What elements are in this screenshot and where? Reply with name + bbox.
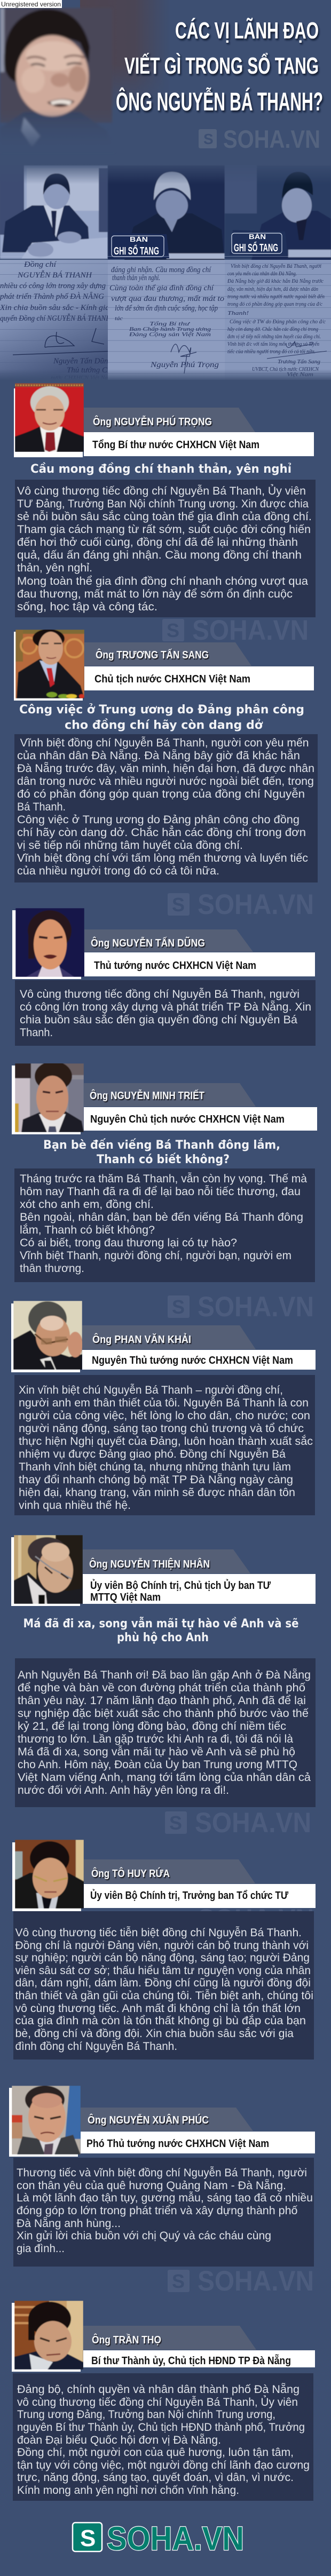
message text block: Thanh vĩnh biệt chúng ta, nhưng những thành tựu làm [19,1461,291,1473]
message text block: chí hãy còn dang dở. Chắc hẳn các đồng chí trong đơn [17,826,306,839]
sign: Bàn ghi sổ tang, right: BÀN [249,233,266,241]
message text block: hôm nay Thanh đã ra đi để lại bao nỗi tiếc thương, đau [20,1186,301,1198]
message text block: gia đình... [17,2243,65,2255]
message text block: có công lớn trong xây dựng và phát triển TP Đà Nẵng. Xin [20,1001,311,1013]
name tab: Ông TRẦN THỌ [92,2333,161,2346]
message text block: Đảng bộ, chính quyền và nhân dân thành phố Đà Nẵng [17,2383,300,2396]
message text block: đến hơi thở cuối cùng, đồng chí đã để lại những thành [17,536,298,548]
page: Trương Tấn Sang: con yêu mến của nhân dân Đà Nẵng. [227,271,297,277]
name tab [81,2108,253,2131]
page: Nguyễn Tấn Dũng: Nguyễn Tấn Dũng [53,357,112,365]
message text block: người anh em thân thiết của tôi. Nguyễn Bá Thanh là con [19,1397,309,1409]
message text block [14,1168,315,1282]
page: Nguyễn Tấn Dũng: nhiều có công lớn trong xây dựng [0,282,106,290]
name tab [83,2326,256,2350]
page: Nguyễn Tấn Dũng: Xin chia buồn sâu sắc - Kính gia [0,304,109,312]
message text block: Đồng chí, một người con của quê hương, luôn tận tâm, [17,2446,294,2459]
page: Nguyễn Phú Trọng: tác [115,315,123,322]
panel: Tô Huy Rứa [12,1840,316,2060]
role bar [84,952,315,976]
message text block: Thanh. [20,1027,53,1039]
message text block: sự nghiệp; người cán bộ năng động, sáng tạo; người Đảng [15,1952,310,1964]
page: Nguyễn Tấn Dũng: Thủ tướng CP [67,366,112,375]
role bar [83,1574,316,1604]
name tab: Ông NGUYỄN THIỆN NHÂN [89,1557,210,1570]
message text block: Đồng chí là người Đảng viên, người cán bộ trung thành với [15,1939,309,1952]
name tab [84,929,253,952]
message text block [15,980,316,1046]
message text block: Vĩnh biệt đồng chí với tấm lòng mến thương và luyến tiếc [17,852,308,864]
role bar [84,666,314,690]
message text block: Công việc ở Trung ương do Đảng phân công cho đồng [17,814,300,826]
message text block: thân thương. [20,1262,84,1275]
message text block: sự nghiệp đặc biệt xuất sắc cho thành phố bước vào thế [18,1707,309,1720]
message text block: Vô cùng thương tiếc đồng chí Nguyễn Bá Thanh, người [20,988,300,1000]
message text block: Việt Nam viếng Anh, mang tới tấm lòng của nhân dân cả [18,1771,311,1784]
message text block: dân, dám nghĩ, dám làm. Đồng chí cũng là người đồng đội [15,1977,311,1989]
page: Nguyễn Phú Trọng: Ban Chấp hành Trung ương [129,326,211,332]
message text block: xót cho anh em, đồng chí. [20,1198,154,1211]
heading: Bạn bè đến viếng Bá Thanh đông lắm, [43,1138,280,1152]
message text block: Đà Nẵng trước đây, văn minh, hiện đại hơn, đã được nhân [17,762,314,775]
message text block [13,2373,313,2501]
message text block [14,734,318,882]
panel: Nguyễn Phú Trọng [14,383,316,617]
page: Nguyễn Tấn Dũng: Đồng chí [23,260,57,269]
message text block: lắm, Thanh có biết không? [20,1224,155,1236]
message text block: người năng động, sáng tạo trong chủ trương và tổ chức [19,1422,304,1435]
message text block: hiện đại, khang trang, văn minh sẽ được nhân dân tôn [19,1486,295,1499]
message text block: đóng góp to lớn trong phát triển và xây dựng thành phố [17,2205,298,2217]
message text block: của gia đình mà còn là tổn thất không gì bù đắp của bạn [15,2015,306,2027]
watermark: section 9: S [172,2270,185,2292]
portrait [11,1301,83,1372]
message text block [15,1658,316,1807]
handwritten condolence pages [0,256,331,381]
page: Trương Tấn Sang: tiếc của nhiều người trong đó có cả tôi nữa. [227,348,316,355]
message text block: Thương tiếc và vĩnh biệt đồng chí Nguyễn Bá Thanh, người [17,2167,307,2179]
message text block: Trung ương Đảng, Trưởng ban Nội chính Trung ương, [17,2408,275,2421]
message text block: Má đã đi xa, song vẫn mãi tự hào về Anh và sẽ phù hộ [18,1746,295,1758]
page: Trương Tấn Sang: Công việc ở TW do Đảng phân công cho đ/c [230,319,326,325]
page: Nguyễn Tấn Dũng: phát triển Thành phố ĐÀ NẴNG [0,292,104,301]
watermark: section 1: SOHA.VN [192,615,309,646]
header photos: signing the condolence book [0,160,331,261]
photo: prime minister signing [0,165,108,259]
name tab: Ông NGUYỄN PHÚ TRỌNG [93,415,212,428]
message text block: Bá Thanh. [17,801,66,813]
message text block: trực, năng động, sáng tạo, quyết đoán, vì dân, vì nước. [17,2471,294,2484]
message text block: Kính mong anh yên nghỉ nơi chốn vĩnh hằng. [17,2484,239,2497]
role bar [84,432,314,456]
role bar: Nguyên Chủ tịch nước CHXHCN Việt Nam [90,1114,285,1125]
sign: Bàn ghi sổ tang, centre: BÀN [130,235,148,243]
message text block: quả, dấu ấn đáng ghi nhận. Cầu mong đồng chí thanh [17,549,302,561]
page: Nguyễn Tấn Dũng: nước CHXHCN Việt Nam [51,375,112,381]
message text block: thân thiết và gần gũi của chúng tôi. Tiễn biệt anh, chúng tôi [15,1990,313,2002]
message text block: vị sẽ tiếp nối những tâm huyết của đồng chí. [17,839,243,852]
name tab [84,1859,255,1883]
panel: Trần Thọ [12,2301,315,2501]
message text block: đó có phần đóng góp quan trọng của đồng chí Nguyễn [17,788,305,800]
portrait [14,629,84,701]
message text block: vô cùng thương tiếc. Anh mất đi không chỉ là tổn thất lớn [15,2002,301,2015]
watermark: section 5: S [172,1296,185,1318]
page: Nguyễn Tấn Dũng [0,260,114,381]
photo: president signing [225,165,331,261]
message text block: Bên ngoài, nhân dân, bạn bè đến viếng Bá Thanh đông [20,1211,303,1223]
message text block: chia buồn sâu sắc đến gia quyến đồng chí Nguyễn Bá [20,1014,297,1026]
message text block: Tháng trước ra thăm Bá Thanh, vẫn còn hy vọng. Thế mà [20,1173,307,1185]
message text block: Là một lãnh đạo tận tụy, gương mẫu, sáng tạo đã có nhiều [17,2192,313,2204]
role bar: Ủy viên Bộ Chính trị, Trưởng ban Tổ chức TƯ [90,1889,288,1902]
page: Nguyễn Phú Trọng: Cùng toàn thể gia đình đồng chí [109,284,215,292]
sign: Bàn ghi sổ tang, centre: GHI SỔ TANG [114,244,159,257]
message text block: Vĩnh biệt đồng chí Nguyễn Bá Thanh, người con yêu mến [20,737,309,749]
message text block: Vô cùng thương tiếc đồng chí Nguyễn Bá Thanh, Ủy viên [17,484,306,497]
message text block: Vĩnh biệt Thanh, người đồng chí, người bạn, người em [20,1250,291,1262]
heading: Công việc ở Trung ương do Đảng phân công [19,703,304,717]
panel: Nguyễn Tấn Dũng [12,908,316,1046]
heading [19,703,304,732]
heading: phù hộ cho Anh [117,1631,209,1644]
portrait [12,1061,84,1134]
page: Trương Tấn Sang: UVBCT, Chủ tịch nước CHXHCN [252,366,319,372]
page: Nguyễn Phú Trọng: đáng ghi nhận. Cầu mong đồng chí [111,266,212,274]
role bar: MTTQ Việt Nam [90,1592,161,1603]
message text block [13,2158,314,2267]
page: Nguyễn Phú Trọng: thanh thản yên nghỉ. [112,274,160,282]
page: Nguyễn Tấn Dũng: quyến Đồng chí NGUYỄN BÁ THANH [0,313,112,323]
message text block: sẻ nỗi buồn sâu sắc cùng toàn thể gia đình của đồng chí. [17,511,312,523]
watermark: section 3: SOHA.VN [198,889,314,920]
main title [116,17,323,116]
header: portrait of Nguyễn Bá Thanh [0,0,171,152]
watermark: section 9: SOHA.VN [198,2265,314,2297]
message text block: của nhiều người trong đó có cả tôi nữa. [17,865,219,877]
role bar [82,1350,316,1370]
message text block: người của công việc, hết lòng lo cho dân, cho nước; con [19,1410,310,1422]
watermark: section 7: SOHA.VN [195,1807,311,1839]
watermark: section 7: S [169,1812,182,1834]
role bar: Phó Thủ tướng nước CHXHCN Việt Nam [86,2138,269,2150]
message text block: TƯ Đảng, Trưởng Ban Nội chính Trung ương. Xin được chia [17,498,309,510]
message text block: kỷ 21, để lại trong lòng đồng bào, đồng chí niềm tiếc [18,1720,286,1732]
page: Nguyễn Tấn Dũng: NGUYỄN BÁ THANH [17,270,92,280]
role bar [84,1107,317,1131]
message text block: của nhân dân Đà Nẵng. Đà Nẵng bây giờ đã khác hẳn [17,749,300,762]
page: Nguyễn Phú Trọng: Nguyễn Phú Trọng [150,361,219,369]
portrait [12,2301,83,2372]
page: Nguyễn Phú Trọng: lớn để sớm ổn định cuộc sống, học tập [115,304,218,313]
photo: general secretary signing [108,165,225,261]
message text block: vô cùng thương tiếc đồng chí Nguyễn Bá Thanh, Ủy viên [17,2396,298,2408]
panel: Trương Tấn Sang [14,629,318,882]
watermark: header: S [203,131,214,147]
watermark: section 1: S [167,619,179,641]
message text block: thương to lớn. Lần gặp trước khi Anh ra đi, tôi đã nói là [18,1733,293,1745]
heading: Thanh có biết không? [97,1153,230,1166]
message text block: thay đổi nhanh chóng bộ mặt TP Đà Nẵng ngày càng [19,1474,293,1486]
panel: Phan Văn Khải [11,1301,316,1515]
role bar: Tổng Bí thư nước CHXHCN Việt Nam [92,439,259,451]
role bar [81,2132,315,2153]
message text block: Anh Nguyễn Bá Thanh ơi! Đã bao lần gặp Anh ở Đà Nẵng [18,1669,311,1681]
name tab: Ông NGUYỄN XUÂN PHÚC [88,2113,209,2126]
page: Trương Tấn Sang [225,260,331,380]
message text block: bè, đồng chí và đồng đội. Xin chia buồn sâu sắc với gia [15,2028,294,2040]
sign: Bàn ghi sổ tang, centre [108,233,169,259]
watermark: behind section 7 panel: SOHA.VN [198,1904,314,1935]
name tab: Ông NGUYỄN TẤN DŨNG [91,936,205,949]
heading: Má đã đi xa, song vẫn mãi tự hào về Anh và sẽ [23,1617,299,1631]
message text block: để nghe và bàn về con đường phát triển của thành phố [18,1682,305,1694]
role bar: Ủy viên Bộ Chính trị, Chủ tịch Ủy ban TƯ [90,1579,271,1592]
page: Nguyễn Phú Trọng [108,260,225,380]
role bar [83,2350,315,2367]
role bar: Thủ tướng nước CHXHCN Việt Nam [94,960,256,972]
heading [43,1138,280,1166]
message text block: Tham gia cách mạng từ rất sớm, suốt cuộc đời cống hiến [17,523,311,536]
message text block: tận tụy với công việc, một người đồng chí lãnh đạo cương [17,2459,310,2471]
portrait [9,2086,81,2157]
portrait [12,908,84,979]
portrait [12,1840,84,1911]
name tab [84,408,255,432]
message text block: nguyên Bí thư Thành ủy, Chủ tịch HĐND thành phố, Trưởng [17,2421,305,2434]
page: Trương Tấn Sang: Trương Tấn Sang [278,359,321,365]
page: Trương Tấn Sang: Thanh! [227,310,249,316]
role bar: Bí thư Thành ủy, Chủ tịch HĐND TP Đà Nẵng [91,2354,291,2367]
message text block: Đà Nẵng anh hùng... [17,2217,121,2230]
message text block: Vô cùng thương tiếc tiễn biệt đồng chí Nguyễn Bá Thanh. [15,1927,302,1939]
message text block: thân yêu này. 17 năm lãnh đạo thành phố, Anh đã để lại [18,1695,306,1707]
page: Nguyễn Phú Trọng: Đảng Cộng sản Việt Nam [129,331,211,338]
message text block [14,1375,315,1515]
role bar: Chủ tịch nước CHXHCN Việt Nam [94,673,250,685]
panel: Nguyễn Xuân Phúc [9,2086,315,2267]
panel: Nguyễn Thiện Nhân [11,1535,316,1807]
heading: Cầu mong đồng chí thanh thản, yên nghỉ [30,463,291,476]
name tab [84,1083,256,1107]
message text block: dân trong nước và nhiều người nước ngoài biết đến, trong [17,775,314,788]
role bar [84,1884,316,1908]
message text block: con thân yêu của quê hương Quảng Nam - Đà Nẵng. [17,2180,286,2192]
role bar: Nguyên Thủ tướng nước CHXHCN Việt Nam [92,1355,293,1366]
message text block: thản, yên nghỉ. [17,562,92,574]
message text block: cho Anh. Hôm này, Đoàn của Ủy ban Trung ương MTTQ [18,1758,297,1771]
page: Trương Tấn Sang: Việt Nam [287,371,313,378]
name tab: Ông TÔ HUY RỨA [91,1867,170,1880]
message text block: đình đồng chí Nguyễn Bá Thanh. [15,2040,177,2053]
page: Nguyễn Phú Trọng: vượt qua đau thương, mất mát to [111,295,225,303]
name tab: Ông PHAN VĂN KHẢI [92,1333,191,1346]
message text block: Mong toàn thể gia đình đồng chí nhanh chóng vượt qua [17,575,308,587]
message text block: vinh qua nhiều thế hệ. [19,1499,131,1512]
panel: Nguyễn Minh Triết [12,1061,317,1282]
message text block: thực hiện Nghị quyết của Đảng, luôn hoàn thành xuất sắc [19,1435,313,1448]
heading [23,1617,299,1644]
sign: Bàn ghi sổ tang, right [230,230,288,256]
message text block: viên sâu sát cơ sở; thấu hiểu tâm tư nguyện vọng của nhân [15,1965,311,1977]
message text block: Xin gửi lời chia buồn với chị Quý và các cháu cùng [17,2230,271,2242]
heading: cho đồng chí hãy còn dang dở [65,719,263,732]
name tab: Ông NGUYỄN MINH TRIẾT [90,1089,204,1102]
page: Nguyễn Phú Trọng: Tổng Bí thư [149,321,190,327]
message text block: sống, học tập và công tác. [17,601,157,613]
footer logo: SOHA.VN: S [80,2525,96,2551]
watermark: section 5: SOHA.VN [198,1291,314,1323]
name tab [83,1549,250,1573]
message text block: đau thương, mất mát to lớn này để sớm ổn định cuộc [17,588,293,600]
name tab: Ông TRƯƠNG TẤN SANG [96,648,209,661]
message text block: Có ai biết, trong đau thương lại có tự hào? [20,1237,237,1249]
message text block [15,480,316,617]
footer logo: SOHA.VN: SOHA.VN [107,2521,244,2557]
name tab [84,642,251,666]
watermark: section 3: S [172,894,185,916]
message text block [13,1911,314,2060]
name tab [82,1325,256,1349]
message text block: nước đối với Anh. Anh hãy yên lòng ra đi!. [18,1784,229,1796]
message text block: đoàn Đại biểu Quốc hội đơn vị Đà Nẵng. [17,2434,221,2446]
portrait [14,383,84,457]
message text block: nhiệm vụ được Đảng giao phó. Đồng chí Nguyễn Bá [19,1448,286,1460]
portrait [11,1535,83,1606]
unregistered version badge: Unregistered version [1,1,61,8]
message text block: Xin vĩnh biệt chú Nguyễn Bá Thanh – người đồng chí, [19,1384,283,1396]
sign: Bàn ghi sổ tang, right: GHI SỔ TANG [234,241,278,254]
